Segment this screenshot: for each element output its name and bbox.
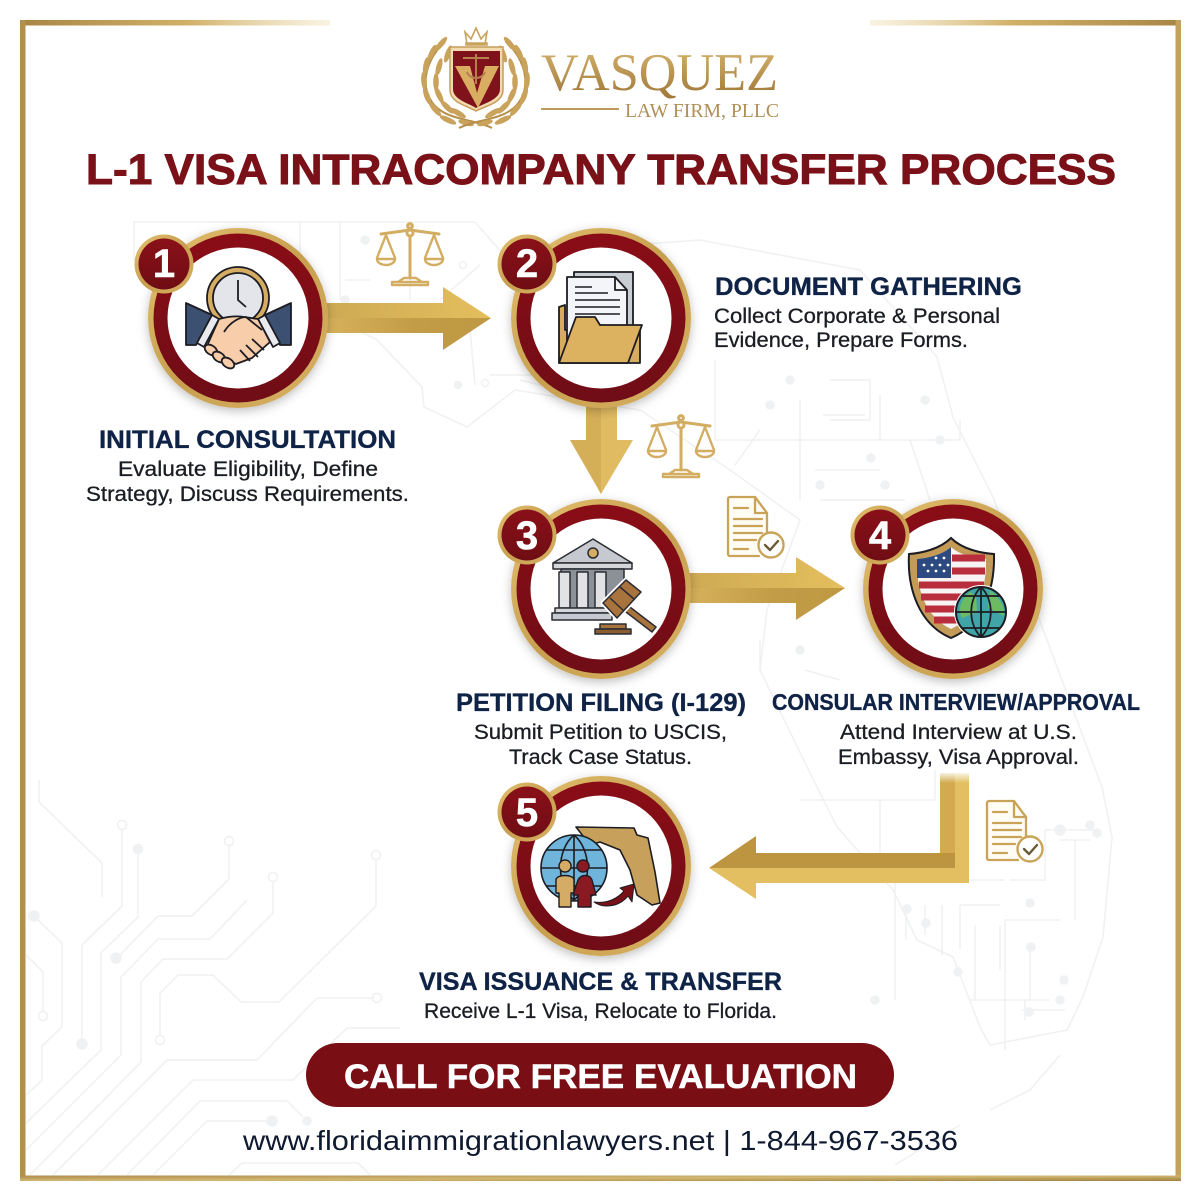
title: L-1 VISA INTRACOMPANY TRANSFER PROCESS <box>86 146 1116 194</box>
step 2 text <box>714 273 1022 352</box>
step 3 text: Track Case Status. <box>509 746 692 769</box>
step 5 medallion <box>498 776 691 956</box>
wordmark: VASQUEZ <box>541 44 778 102</box>
step 5 text: Receive L-1 Visa, Relocate to Florida. <box>424 1000 777 1023</box>
call to action button: CALL FOR FREE EVALUATION <box>344 1058 857 1096</box>
icon: courthouse with gavel <box>552 539 656 634</box>
step 4 text: Embassy, Visa Approval. <box>838 746 1079 769</box>
arrow: step 3 to step 4 <box>684 557 845 620</box>
badge 4 <box>850 506 910 564</box>
step 4 medallion <box>850 499 1043 679</box>
icon: shield <box>450 47 503 111</box>
icon: document with check lower <box>987 801 1042 862</box>
icon: crown <box>465 28 487 45</box>
arrow: step 4 to step 5 <box>709 771 971 899</box>
step 4 text: CONSULAR INTERVIEW/APPROVAL <box>772 689 1140 715</box>
step 5 text: VISA ISSUANCE & TRANSFER <box>419 968 782 996</box>
arrow: step 2 to step 3 <box>570 400 633 494</box>
step 1 text <box>86 426 409 506</box>
call to action button <box>306 1043 894 1107</box>
badge 2 <box>498 234 556 294</box>
icon: US flag shield with globe <box>909 538 1008 639</box>
logo: Vasquez Law Firm: LAW FIRM, PLLC <box>625 100 779 122</box>
icon: scales of justice lower <box>648 416 714 477</box>
icon: globe, people, Florida map <box>541 827 660 907</box>
step 4 text: Attend Interview at U.S. <box>840 721 1077 744</box>
icon: laurel wreath <box>420 35 531 128</box>
step 3 text: Submit Petition to USCIS, <box>474 721 727 744</box>
badge 5: 5 <box>516 791 538 835</box>
step 3 text <box>456 689 746 769</box>
badge 1 <box>134 234 194 294</box>
icon: clock and handshake <box>186 267 291 371</box>
badge 2: 2 <box>516 242 538 286</box>
badge 1: 1 <box>153 242 175 286</box>
step 2 text: Evidence, Prepare Forms. <box>714 329 968 352</box>
logo: Vasquez Law Firm <box>420 28 779 128</box>
step 1 medallion <box>134 228 328 408</box>
step 3 medallion <box>498 499 691 679</box>
badge 5 <box>498 782 556 842</box>
step 5 text <box>419 968 782 1023</box>
arrow: step 1 to step 2 <box>322 287 491 350</box>
badge 4: 4 <box>869 514 892 558</box>
step 2 text: DOCUMENT GATHERING <box>715 273 1022 301</box>
step 4 text <box>772 689 1140 769</box>
step 1 text: Strategy, Discuss Requirements. <box>86 483 409 506</box>
badge 3: 3 <box>516 514 538 558</box>
step 1 text: Evaluate Eligibility, Define <box>118 458 378 481</box>
icon: scales of justice upper <box>377 224 443 285</box>
step 2 medallion <box>498 228 691 408</box>
badge 3 <box>498 506 556 564</box>
icon: document with check upper <box>728 497 784 558</box>
contact line: www.floridaimmigrationlawyers.net | 1-844-967-3536 <box>242 1125 958 1156</box>
background: faint Florida map and circuit pattern <box>26 222 1112 1175</box>
step 1 text: INITIAL CONSULTATION <box>99 426 396 454</box>
icon: folder with documents <box>559 272 642 363</box>
step 2 text: Collect Corporate & Personal <box>714 305 1000 328</box>
step 3 text: PETITION FILING (I-129) <box>456 689 746 717</box>
